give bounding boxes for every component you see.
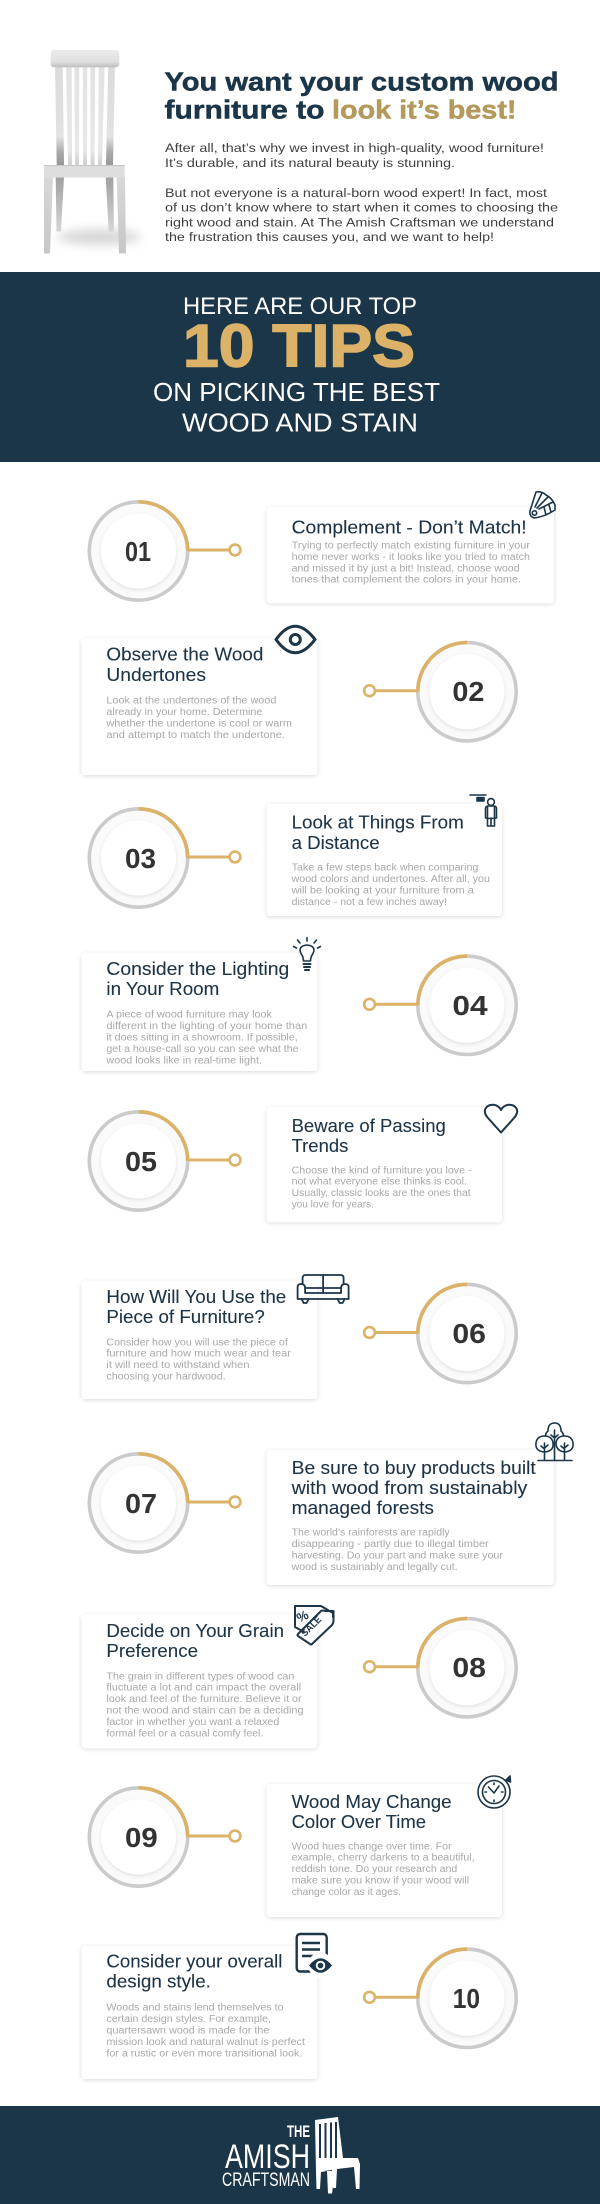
badge 03 bbox=[89, 809, 240, 907]
card 04: Consider the Lighting bbox=[106, 959, 289, 979]
intro text: After all, that’s why we invest in high-quality, wood furniture! bbox=[165, 141, 544, 155]
card 06: it will need to withstand when bbox=[106, 1360, 250, 1371]
badge 09: 09 bbox=[125, 1822, 158, 1853]
card 06: furniture and how much wear and tear bbox=[106, 1349, 292, 1360]
card 04: wood looks like in real-time light. bbox=[105, 1055, 262, 1066]
card 02: Observe the Wood bbox=[106, 645, 263, 665]
card 01: Trying to perfectly match existing furniture in your bbox=[292, 541, 531, 552]
footer band bbox=[0, 2106, 600, 2204]
card 04: different in the lighting of your home than bbox=[106, 1021, 307, 1032]
card 05: Usually, classic looks are the ones that bbox=[292, 1188, 471, 1199]
card 02: Undertones bbox=[106, 665, 206, 685]
card 10: mission look and natural walnut is perfect bbox=[106, 2037, 305, 2048]
card 09: example, cherry darkens to a beautiful, bbox=[292, 1853, 475, 1864]
card 02: Look at the undertones of the wood bbox=[106, 696, 276, 707]
card 09 bbox=[267, 1784, 502, 1917]
intro text: But not everyone is a natural-born wood expert! In fact, most bbox=[165, 186, 548, 200]
icon: light bulb bbox=[294, 938, 320, 970]
card 03: Look at Things From bbox=[292, 813, 464, 833]
icon: eye bbox=[276, 626, 315, 653]
badge 01 bbox=[89, 502, 240, 600]
card 01 bbox=[267, 507, 554, 603]
intro text: the frustration this causes you, and we want to help! bbox=[165, 230, 494, 244]
card 09: make sure you know if your wood will bbox=[292, 1876, 469, 1886]
card 10: certain design styles. For example, bbox=[106, 2014, 271, 2025]
card 08: not the wood and stain can be a deciding bbox=[106, 1706, 304, 1716]
card 07: disappearing - partly due to illegal timber bbox=[292, 1539, 489, 1550]
badge 08 bbox=[364, 1618, 516, 1717]
icon: sale tags: % bbox=[294, 1607, 311, 1625]
card 04: A piece of wood furniture may look bbox=[106, 1010, 273, 1021]
card 07: harvesting. Do your part and make sure your bbox=[292, 1550, 504, 1562]
title bbox=[164, 67, 558, 125]
badge 06 bbox=[364, 1284, 516, 1383]
card 03: Take a few steps back when comparing bbox=[292, 863, 478, 874]
card 02: and attempt to match the undertone. bbox=[106, 730, 285, 741]
card 05: Trends bbox=[292, 1136, 348, 1156]
banner: top 10 tips: WOOD AND STAIN bbox=[182, 408, 418, 438]
card 10 bbox=[82, 1946, 317, 2079]
illustration: white chair bbox=[44, 50, 141, 254]
card 03 bbox=[267, 804, 502, 916]
card 10: quartersawn wood is made for the bbox=[106, 2026, 270, 2036]
icon: stopwatch bbox=[478, 1776, 510, 1808]
icon: sale tags bbox=[294, 1606, 334, 1644]
badge 10: 10 bbox=[453, 1983, 480, 2014]
card 07 bbox=[267, 1450, 554, 1585]
icon: sale tags: SALE bbox=[299, 1614, 324, 1639]
badge 10 bbox=[364, 1949, 516, 2048]
card 08: Preference bbox=[106, 1641, 198, 1661]
card 07: The world’s rainforests are rapidly bbox=[292, 1528, 450, 1539]
badge 01: 01 bbox=[125, 536, 151, 567]
banner: top 10 tips: 10 TIPS bbox=[183, 313, 415, 380]
card 07: Be sure to buy products built bbox=[292, 1458, 536, 1478]
badge 02 bbox=[364, 642, 516, 741]
banner: top 10 tips: ON PICKING THE BEST bbox=[153, 377, 440, 407]
card 05: Beware of Passing bbox=[292, 1116, 446, 1136]
card 06: How Will You Use the bbox=[106, 1287, 286, 1307]
card 10: for a rustic or even more transitional look. bbox=[106, 2048, 302, 2059]
badge 07 bbox=[89, 1454, 240, 1552]
banner: top 10 tips bbox=[0, 272, 600, 462]
card 09: change color as it ages. bbox=[292, 1887, 401, 1898]
card 03: wood colors and undertones. After all, you bbox=[291, 874, 490, 885]
card 08 bbox=[82, 1614, 317, 1748]
card 10: Woods and stains lend themselves to bbox=[106, 2003, 284, 2014]
card 06: Piece of Furniture? bbox=[106, 1307, 265, 1327]
badge 08: 08 bbox=[452, 1652, 486, 1683]
icon: trees bbox=[536, 1423, 573, 1460]
card 01: tones that complement the colors in your home. bbox=[292, 575, 521, 586]
badge 03: 03 bbox=[125, 843, 156, 874]
logo: The Amish Craftsman: THE bbox=[287, 2123, 310, 2141]
icon: person looking from a distance bbox=[470, 795, 496, 826]
card 09: Color Over Time bbox=[292, 1812, 426, 1832]
card 06 bbox=[82, 1281, 317, 1399]
card 08: formal feel or a casual comfy feel. bbox=[106, 1728, 263, 1739]
badge 05 bbox=[89, 1112, 240, 1210]
card 09: Wood May Change bbox=[292, 1792, 452, 1812]
card 01: home never works - it looks like you tried to match bbox=[292, 552, 530, 563]
banner: top 10 tips: HERE ARE OUR TOP bbox=[183, 293, 417, 320]
card 01: Complement - Don’t Match! bbox=[292, 517, 527, 537]
intro text: of us don’t know where to start when it comes to choosing the bbox=[165, 200, 558, 214]
card 03: a Distance bbox=[292, 833, 380, 853]
badge 04: 04 bbox=[452, 990, 488, 1021]
card 08: Decide on Your Grain bbox=[106, 1621, 284, 1641]
title: look it’s best! bbox=[332, 95, 516, 125]
card 02 bbox=[82, 638, 317, 775]
badge 09 bbox=[89, 1788, 240, 1886]
title: You want your custom wood bbox=[164, 67, 558, 97]
card 08: fluctuate a lot and can impact the overall bbox=[106, 1683, 301, 1694]
card 07: wood is sustainably and legally cut. bbox=[291, 1562, 458, 1573]
card 10: Consider your overall bbox=[106, 1952, 282, 1972]
card 09: Wood hues change over time. For bbox=[292, 1841, 452, 1852]
title: furniture to bbox=[164, 95, 324, 125]
card 08: The grain in different types of wood can bbox=[106, 1671, 294, 1682]
card 01: and missed it by just a bit! Instead, choose wood bbox=[292, 563, 520, 574]
card 10: design style. bbox=[106, 1972, 211, 1992]
card 08: factor in whether you want a relaxed bbox=[106, 1717, 279, 1728]
logo: The Amish Craftsman: AMISH bbox=[225, 2138, 310, 2176]
card 07: with wood from sustainably bbox=[291, 1478, 527, 1498]
logo: The Amish Craftsman bbox=[222, 2117, 360, 2194]
card 09: reddish tone. Do your research and bbox=[292, 1864, 457, 1875]
card 03: will be looking at your furniture from a bbox=[291, 886, 474, 896]
logo: The Amish Craftsman: CRAFTSMAN bbox=[222, 2169, 310, 2191]
card 06: Consider how you will use the piece of bbox=[106, 1337, 288, 1348]
badge 07: 07 bbox=[125, 1488, 157, 1519]
card 05 bbox=[267, 1107, 502, 1222]
icon: colour swatch fan bbox=[530, 492, 555, 518]
intro text: It’s durable, and its natural beauty is stunning. bbox=[165, 156, 455, 170]
card 05: Choose the kind of furniture you love - bbox=[292, 1165, 472, 1176]
card 07: managed forests bbox=[292, 1498, 434, 1518]
card 04 bbox=[82, 953, 317, 1071]
badge 02: 02 bbox=[452, 676, 484, 707]
intro text bbox=[165, 141, 558, 244]
badge 06: 06 bbox=[452, 1318, 486, 1349]
icon: document with eye bbox=[297, 1934, 333, 1978]
icon: sofa bbox=[298, 1275, 349, 1303]
badge 05: 05 bbox=[125, 1146, 157, 1177]
card 02: already in your home. Determine bbox=[106, 707, 263, 718]
card 05: you love for years. bbox=[292, 1200, 374, 1210]
card 08: look and feel of the furniture. Believe it or bbox=[106, 1694, 302, 1705]
card 04: get a house-call so you can see what the bbox=[106, 1044, 299, 1055]
card 04: in Your Room bbox=[106, 979, 219, 999]
badge 04 bbox=[364, 956, 516, 1054]
intro text: right wood and stain. At The Amish Craftsman we understand bbox=[165, 215, 554, 229]
icon: heart bbox=[485, 1105, 517, 1132]
card 05: not what everyone else thinks is cool. bbox=[292, 1177, 467, 1188]
card 04: it does sitting in a showroom. If possible, bbox=[106, 1032, 298, 1044]
card 02: whether the undertone is cool or warm bbox=[105, 718, 292, 730]
card 03: distance - not a few inches away! bbox=[292, 897, 447, 908]
card 06: choosing your hardwood. bbox=[106, 1372, 226, 1382]
